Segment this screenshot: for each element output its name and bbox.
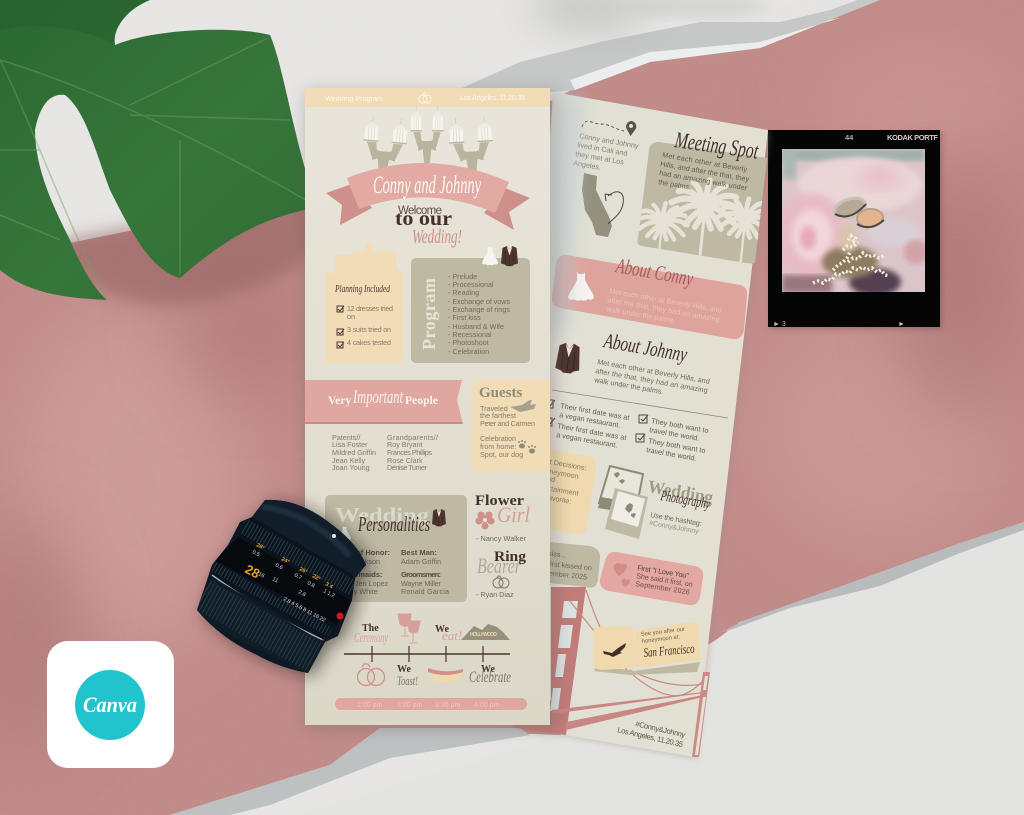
illustration: hollywood hills: [461, 624, 510, 640]
icon: jacket: [432, 509, 446, 526]
time pill: [335, 698, 527, 710]
important people names: Roy Bryant: [387, 440, 423, 449]
grip ring: [197, 580, 318, 673]
panel: wedding personalities: Groomsmen:: [401, 570, 441, 579]
panel: planning included: 3 suits tried on: [347, 325, 391, 334]
flower girl: - Nancy Walker: [476, 534, 527, 543]
panel: wedding personalities: Jen Lopez: [355, 579, 389, 588]
panel: planning included: on: [347, 312, 355, 321]
title: welcome to our wedding: [395, 205, 462, 248]
banner: very important people: Very: [328, 395, 351, 407]
flower girl: Girl: [497, 502, 530, 527]
important people names: Grandparents//: [387, 433, 438, 442]
panel: program: - Photoshoot: [448, 338, 489, 347]
event: the ceremony: The: [362, 623, 379, 634]
ring bearer: Ring: [494, 549, 527, 565]
monstera leaf: [0, 0, 318, 300]
timeline: [335, 614, 527, 710]
event: we eat: We: [435, 624, 449, 635]
important people names: Patents//: [332, 433, 360, 442]
checklist facts: They both want to: [651, 416, 709, 435]
icon: rings: [493, 576, 509, 588]
important people names: [332, 433, 438, 472]
ribbed focus ring: [252, 517, 353, 601]
tickets: honeymoon at:: [642, 634, 681, 645]
panel: guests: Spot, our dog: [480, 450, 523, 459]
panel: planning included: Planning Included: [334, 284, 391, 295]
panel: wedding personalities: Best Man:: [401, 548, 437, 557]
panel: program: - Recessional: [448, 330, 492, 339]
lens scale numbers: 3 4: [324, 581, 334, 591]
ribbon banner: [326, 163, 530, 230]
icon: paw prints: [518, 440, 536, 454]
time pill: 2:00 pm: [357, 702, 382, 709]
panel: program: - Reading: [448, 288, 479, 297]
lens scale numbers: 11: [271, 576, 279, 584]
icon: dotted route and pin: [582, 121, 636, 136]
text: about johnny: after the that, they had an amazing: [595, 366, 708, 395]
lens scale numbers: 28°: [255, 542, 265, 552]
important people names: Lisa Foster: [332, 440, 368, 449]
title: welcome to our wedding: to our: [395, 208, 452, 230]
panel: first kiss: They first kissed on: [530, 557, 592, 572]
panel: wedding personalities: [325, 495, 467, 602]
text: about johnny: walk under the palms.: [593, 375, 664, 396]
tickets: San Francisco: [643, 641, 695, 660]
banner names: Conny and Johnny: [373, 172, 482, 199]
event: we celebrate: [469, 664, 511, 686]
film label: kodak: KODAK PORTF: [887, 133, 938, 142]
event: the ceremony: Ceremony: [354, 631, 388, 646]
heading: meeting spot: Meeting Spot: [673, 127, 760, 164]
bridge illustration: [510, 587, 710, 757]
important people names: Joan Young: [332, 463, 370, 472]
event: we celebrate: Celebrate: [469, 669, 511, 686]
text: about johnny: Met each other at Beverly Hills, and: [597, 357, 710, 386]
ring bearer: Bearer: [477, 553, 521, 578]
lens scale numbers: [243, 542, 336, 624]
important people names: Jean Kelly: [332, 456, 366, 465]
lens scale numbers: 22°: [311, 573, 321, 583]
time pill: 4:00 pm: [474, 702, 499, 709]
film label: kodak: ► 3: [773, 321, 786, 328]
panel: first kiss: September 2025: [534, 567, 588, 582]
lens scale numbers: 16: [257, 571, 265, 580]
icon: dress: [568, 272, 594, 301]
important people names: Denise Turner: [387, 463, 428, 472]
canva badge: [47, 641, 174, 768]
panel: wedding personalities: Amy White: [343, 587, 378, 596]
panel: about conny: after the that, they had an amazing: [607, 295, 720, 324]
panel: wedding personalities: Wayne Miller: [401, 579, 442, 588]
icon: flower: [476, 512, 494, 530]
panel: wedding personalities: Wedding: [335, 503, 430, 527]
flower girl: Flower: [475, 493, 524, 509]
event: the ceremony: [354, 623, 388, 646]
icon: dress: [338, 526, 351, 540]
banner: very important people: [305, 380, 463, 424]
lens scale numbers: 2.8 4 5.6 8 11 16 22: [282, 596, 326, 624]
time pill: 3:00 pm: [397, 702, 422, 709]
panel: guests: Peter and Carmen: [480, 419, 535, 428]
panel: wedding personalities: Adam Griffin: [401, 557, 441, 566]
text: hashtag: Use the hashtag:: [650, 510, 702, 528]
panel: wedding personalities: Ronald Garcia: [401, 587, 449, 596]
panel: first kiss: First kiss...: [532, 547, 567, 560]
header band: Los Angeles, 11.20.35: [460, 93, 525, 102]
panel: program: - Exchange of vows: [448, 297, 510, 306]
panel: first i love you: She said it first, on: [636, 571, 693, 589]
checklist facts: [547, 400, 709, 463]
panel: wedding personalities: Bridesmaids:: [335, 570, 383, 579]
meeting story text: they met at Los: [575, 149, 625, 167]
icon: polaroid photos: [598, 466, 648, 539]
header band: [305, 88, 550, 107]
time pill: 3:30 pm: [435, 702, 460, 709]
panel: wedding personalities: Personalities: [357, 512, 430, 536]
icon: plane: [510, 400, 536, 412]
left card: front of wedding program: [305, 88, 550, 725]
camera lens: [197, 500, 366, 673]
text: hashtag: [649, 510, 702, 536]
arrow: [605, 192, 623, 224]
meeting story text: Angeles.: [573, 158, 602, 172]
title: welcome to our wedding: Wedding!: [412, 226, 462, 248]
illustration: hollywood hills: HOLLYWOOD: [470, 632, 497, 638]
lower ribbed ring: [214, 560, 216, 562]
panel: about conny: Met each other at Beverly Hills, and: [609, 286, 722, 315]
heading: wedding photography: Wedding: [646, 476, 715, 507]
lens scale numbers: 0.5: [251, 549, 261, 558]
banner: very important people: People: [405, 395, 438, 407]
illustration: street lamps: [361, 105, 494, 174]
panel: decisions: and: [543, 473, 556, 484]
panel: guests: Celebration: [480, 434, 516, 443]
panel: meeting spot: [638, 142, 767, 264]
important people names: Frances Phillips: [387, 448, 432, 457]
panel: meeting spot: the palms.: [658, 177, 692, 192]
panel: decisions: [520, 445, 596, 534]
panel: decisions: Last Decisions:: [538, 455, 587, 472]
panel: decisions: Our favorite:: [532, 490, 572, 506]
icon: hot dog: [428, 668, 463, 683]
event: we toast: Toast!: [397, 673, 418, 688]
panel: first kiss: [530, 541, 600, 588]
heading: wedding photography: Photography: [659, 488, 712, 513]
icon: rings: [419, 93, 431, 103]
panel: program: - Exchange of rings: [448, 305, 510, 314]
panel: program: - Prelude: [448, 272, 477, 281]
checklist facts: a vegan restaurant.: [559, 410, 621, 430]
event: we eat: [435, 624, 462, 643]
icon: jacket: [555, 342, 582, 374]
tickets: [593, 622, 700, 675]
right card: back of wedding program: [510, 92, 774, 759]
icon: wine glasses: [398, 614, 420, 643]
flower girl: [475, 493, 530, 543]
panel: about conny: walk under the palms.: [605, 304, 676, 325]
checklist facts: a vegan restaurant.: [556, 430, 618, 450]
ring bearer: [476, 549, 527, 599]
panel: program: - First kiss: [448, 313, 481, 322]
text: closing signature: Los Angeles, 11.20.35: [617, 725, 684, 749]
palm silhouettes: [639, 177, 762, 262]
panel: about conny: [552, 255, 747, 339]
panel: program: - Celebration: [448, 347, 489, 356]
lens scale numbers: 2.8: [297, 589, 307, 598]
event: we toast: [397, 664, 418, 688]
canva logo: Canva: [83, 692, 137, 717]
panel: wedding personalities: Kelly Jackson: [336, 557, 380, 566]
important people names: Mildred Griffin: [332, 448, 376, 457]
heading: about johnny: About Johnny: [601, 328, 690, 367]
panel: planning included: 12 dresses tried: [347, 304, 393, 313]
panel: program: [411, 246, 530, 363]
tickets: See you after our: [641, 627, 685, 638]
film label: kodak: 44: [845, 133, 854, 142]
panel: first i love you: First "I Love You": [637, 563, 690, 580]
panel: guests: the farthest: [480, 411, 516, 420]
film frame photo: [768, 130, 942, 329]
panel: meeting spot: Met each other at Beverly: [662, 150, 748, 174]
lens scale numbers: 24°: [280, 556, 290, 566]
event: we celebrate: We: [481, 664, 495, 675]
checklist facts: travel the world.: [646, 445, 697, 463]
lens scale numbers: 26°: [298, 566, 308, 576]
event: we eat: eat!: [442, 628, 462, 643]
important people names: Rose Clark: [387, 456, 423, 465]
panel: guests: from home:: [480, 442, 516, 451]
title: welcome to our wedding: Welcome: [398, 205, 442, 217]
icon: rings: [358, 664, 384, 686]
lens shadow: [203, 503, 372, 676]
ring bearer: - Ryan Diaz: [476, 590, 514, 599]
text: hashtag: #Conny&Johnny: [649, 518, 700, 536]
film label: kodak: ►: [898, 321, 905, 328]
lens scale numbers: 28: [243, 561, 262, 581]
left card shadow: [305, 90, 557, 730]
film label: kodak: [773, 133, 938, 328]
torn paper edge: bottom right: [300, 522, 1024, 815]
lens scale numbers: 0.6: [274, 562, 284, 571]
panel: program: - Husband & Wife: [448, 322, 504, 331]
icon: california map: [582, 173, 612, 237]
heading: about conny: About Conny: [613, 253, 696, 291]
wedding rings photograph: [782, 149, 925, 292]
scale band: [215, 537, 352, 625]
panel: guests: [472, 380, 550, 472]
icon: white dress: [482, 246, 498, 265]
banner: very important people: Important: [352, 387, 403, 408]
panel: decisions: Honeymoon: [540, 465, 579, 481]
icon: black jacket: [501, 246, 518, 266]
lens scale numbers: 0.7: [293, 572, 303, 581]
checklist facts: travel the world.: [649, 425, 700, 443]
panel: wedding personalities: Maid of Honor:: [337, 548, 390, 557]
panel: program: - Processional: [448, 280, 494, 289]
checklist facts: They both want to: [648, 436, 706, 455]
panel: decisions: Entertainment: [534, 481, 579, 498]
front cap: [252, 500, 366, 580]
panel: guests: Traveled: [480, 404, 508, 413]
panel: first i love you: [600, 552, 703, 605]
header band: Wedding Program: [325, 94, 383, 103]
panel: program: Program: [419, 278, 439, 350]
panel: planning included: [326, 243, 403, 363]
panel: planning included: 4 cakes tested: [347, 338, 391, 347]
silver ring: [212, 575, 323, 640]
panel: meeting spot: had an amazing walk under: [659, 168, 748, 193]
torn paper edge: bottom left: [170, 728, 530, 815]
checklist facts: Their first date was at: [557, 421, 627, 442]
lens scale numbers: 1 1.2: [322, 588, 336, 600]
fold shading: [545, 92, 585, 330]
lens scale numbers: 0.8: [306, 580, 316, 589]
text: closing signature: #Conny&Johnny: [635, 719, 687, 739]
event: we toast: We: [397, 664, 411, 675]
checklist facts: Their first date was at: [560, 401, 630, 422]
meeting story text: lived in Cali and: [577, 140, 628, 158]
panel: meeting spot: Hills, and after the that, they: [660, 159, 750, 184]
panel: guests: Guests: [479, 385, 522, 401]
leaf shadow: [60, 190, 340, 305]
meeting story text: Conny and Johnny: [579, 131, 640, 150]
icon: airplane: [603, 643, 626, 657]
panel: first i love you: September 2026: [635, 579, 690, 597]
torn paper edge: top: [462, 0, 880, 95]
meeting story text: [573, 131, 640, 172]
